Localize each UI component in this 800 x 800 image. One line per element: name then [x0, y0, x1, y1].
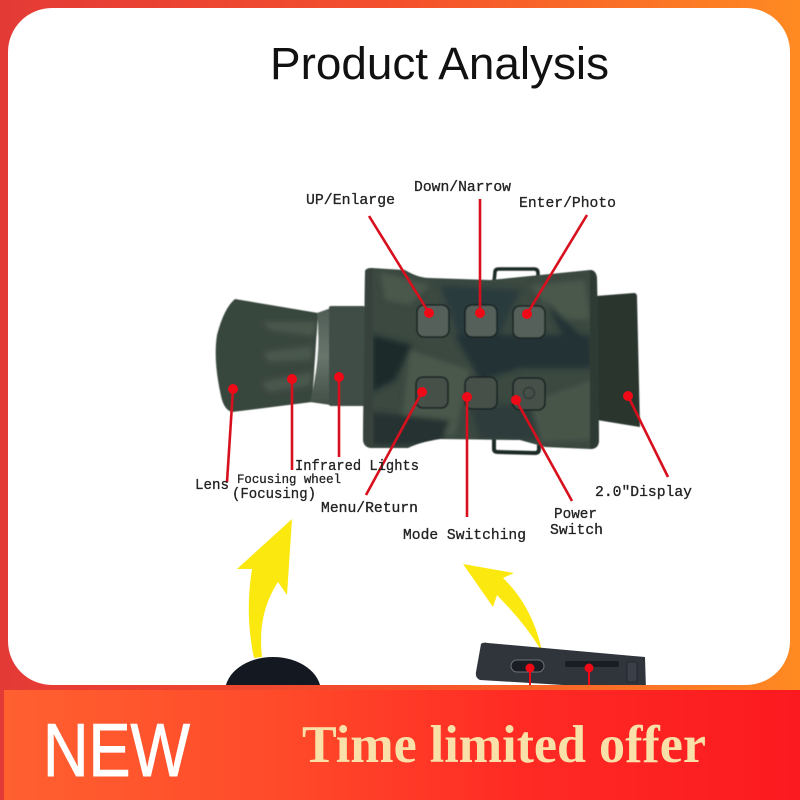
- callout: Infrared: [334, 372, 344, 457]
- label: Lens: Lens: [195, 477, 229, 494]
- button: menu: [416, 377, 448, 408]
- callout: UP: [369, 216, 434, 318]
- label: Focusing wheel: Focusing wheel: [237, 472, 341, 487]
- label: Down/Narrow: Down/Narrow: [414, 179, 511, 196]
- display hood: [596, 293, 640, 427]
- label: Menu/Return: Menu/Return: [321, 500, 418, 517]
- callout: Enter: [522, 215, 587, 319]
- yellow arrow: left: [237, 519, 292, 658]
- dark dome: [226, 657, 320, 685]
- callout: Down: [475, 199, 485, 318]
- NEW text: NEW: [43, 708, 190, 792]
- button: power: [513, 378, 545, 410]
- label: (Focusing): (Focusing): [232, 486, 316, 503]
- yellow arrow: right: [463, 564, 542, 652]
- label: Infrared Lights: Infrared Lights: [295, 458, 419, 475]
- main body: [360, 265, 600, 455]
- callout: Mode: [462, 392, 472, 517]
- callout: Focusing: [287, 374, 297, 470]
- label: Power Switch: Switch: [550, 522, 603, 539]
- label: Mode Switching: Mode Switching: [403, 527, 526, 544]
- callout: Power: [511, 395, 572, 501]
- bottom parts: [226, 642, 646, 685]
- callout: Lens: [227, 384, 238, 482]
- title: Product Analysis: [270, 38, 609, 89]
- label: 2.0"Display: 2.0"Display: [595, 484, 692, 501]
- bottom banner: [0, 690, 800, 800]
- eyepiece lens hood: [216, 299, 318, 412]
- label: Enter/Photo: Enter/Photo: [519, 195, 616, 212]
- label: Power Switch: [550, 506, 603, 539]
- button: up: [417, 305, 449, 337]
- callout lines with dots: [227, 199, 668, 517]
- device: night vision monocular: [216, 265, 640, 455]
- label: Power Switch: Power: [554, 506, 597, 523]
- label: UP/Enlarge: UP/Enlarge: [306, 192, 395, 209]
- callout: Display: [623, 391, 668, 477]
- callout: Menu: [366, 387, 427, 495]
- button: enter: [513, 306, 545, 338]
- offer text: Time limited offer: [302, 716, 706, 774]
- focusing ring: [310, 308, 331, 405]
- button: down: [465, 305, 497, 337]
- bottom strap: [494, 438, 539, 453]
- button: mode: [465, 377, 497, 409]
- side view of device: [476, 642, 646, 685]
- barrel: [329, 306, 365, 406]
- top strap: [494, 269, 538, 282]
